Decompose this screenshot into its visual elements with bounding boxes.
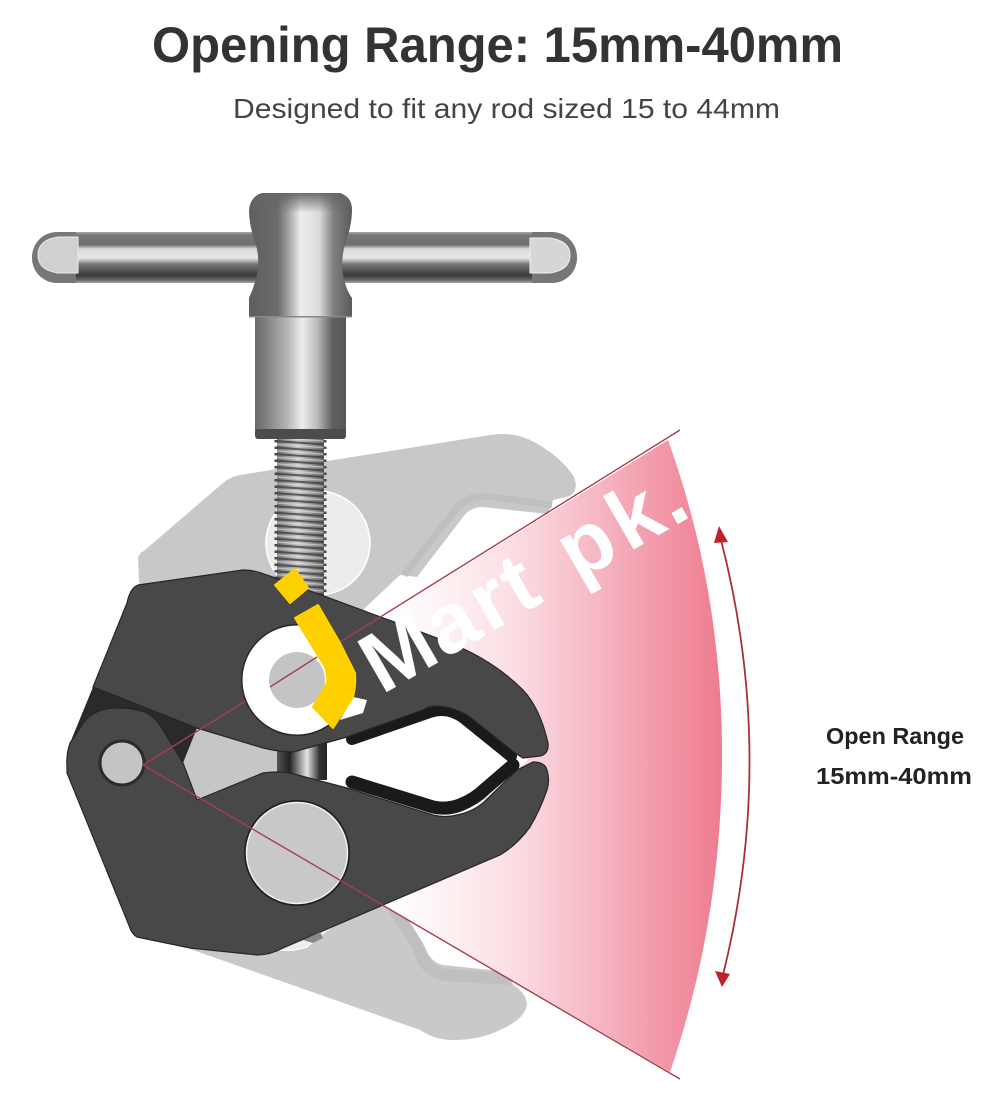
white jaw opening [327, 702, 528, 818]
watermark text: Mart pk. [344, 449, 703, 711]
subtitle: Designed to fit any rod sized 15 to 44mm [233, 93, 780, 124]
ghost lower inner band [390, 902, 510, 979]
upper rubber pad [352, 710, 511, 756]
open range label: 15mm-40mm [816, 763, 972, 789]
T-handle screw [32, 193, 577, 600]
right bar end [530, 238, 570, 273]
ghost clamp: open position [138, 434, 576, 1040]
upper jaw [93, 570, 548, 758]
grip head [249, 193, 352, 317]
fan edge lines [143, 430, 680, 1079]
open range label: Open Range [826, 723, 964, 749]
black clamp [67, 570, 549, 955]
lower jaw [67, 708, 549, 955]
open range label [816, 723, 972, 789]
ghost upper inner band [404, 496, 552, 575]
threaded shaft [276, 438, 325, 600]
bolt nub under clamp [303, 932, 323, 943]
logo ring [241, 624, 367, 736]
window behind pivot [183, 728, 277, 800]
ghost lower jaw [190, 890, 527, 1040]
ghost upper jaw [138, 434, 576, 700]
title: Opening Range: 15mm-40mm [152, 17, 843, 73]
range arrow [714, 526, 750, 987]
logo letter j [275, 569, 355, 728]
arrowhead down [715, 971, 730, 987]
screw stem in jaw gap [277, 738, 327, 780]
crossbar [32, 232, 577, 283]
lower bolt [244, 800, 350, 906]
ghost upper bolt [266, 491, 370, 595]
open range fan [143, 440, 722, 1072]
ghost lower bolt end [262, 925, 330, 951]
pivot pin [100, 741, 144, 785]
collar cylinder [249, 316, 352, 439]
left bar end [38, 237, 78, 273]
dark wedge [70, 687, 197, 763]
lower rubber pad [352, 765, 513, 808]
arrowhead up [714, 526, 728, 543]
watermark logo [241, 449, 703, 736]
